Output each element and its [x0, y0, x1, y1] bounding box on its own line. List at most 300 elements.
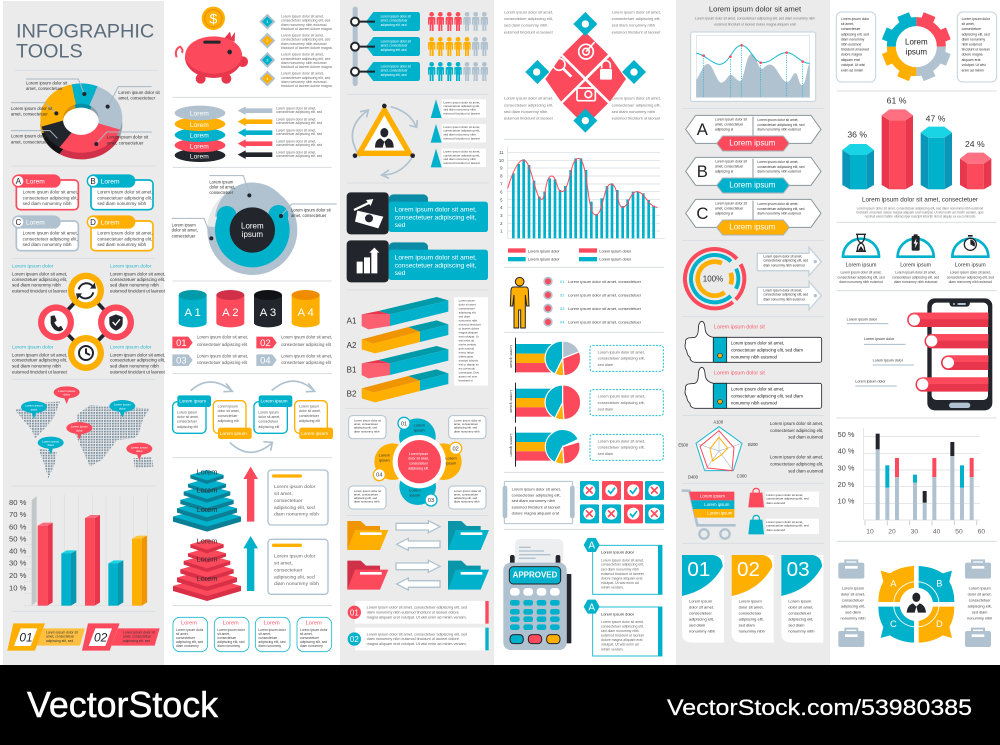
dashed text boxes: Lorem ipsum dolor sit amet,: [598, 395, 645, 399]
donut chart: amet, consectetuer: [11, 139, 48, 144]
triangle list: consectetuer adipiscing elit,: [443, 153, 480, 157]
numbered strip 02: diam nonummy nibh euismod tincidunt ut laoreet dolore: [367, 637, 459, 641]
four outlined text cards: adipiscing elit, sed: [300, 640, 327, 644]
stacked ellipses with arrows: consectetuer adipiscing elit, sed: [276, 110, 322, 114]
narrow text column: ut laoreet dolore: [459, 327, 480, 331]
corner text: euismod tincidunt ut laoreet: [612, 116, 661, 121]
dotted world map: Lorem ipsum: [114, 403, 131, 407]
lower middle quadrant: [346, 297, 664, 656]
network lower text: Lorem ipsum dolor sit amet,: [110, 352, 165, 357]
label box A: Lorem: [26, 179, 45, 186]
hexagonal prism bars: 36 %: [847, 129, 867, 139]
chart legend: [508, 248, 632, 262]
red pyramid: Lorem: [197, 574, 217, 583]
dotted world map: dolor: [119, 406, 126, 410]
semicircle icons: consectetuer adipiscing elit, sed: [892, 275, 939, 279]
stacked bars with pies: Lorem ipsum: [509, 390, 514, 414]
card 02: dolor sit amet,: [739, 605, 764, 610]
phone labels: Lorem ipsum dolor: [873, 359, 904, 363]
network lower text: Lorem ipsum dolor: [12, 345, 54, 351]
shopping bags with text: consectetuer adipiscing elit, sed: [766, 497, 809, 501]
hexagon row B: Lorem ipsum: [729, 181, 776, 190]
outlined arrows: diam nonummy nibh euismod: [763, 297, 805, 301]
shopping bags with text: [748, 488, 819, 534]
outlined arrows: diam nonummy nibh euismod: [763, 263, 805, 267]
process flow: adipiscing elit: [218, 419, 239, 423]
gear left text box: volutpat. Ut wisi: [841, 63, 865, 67]
text card upper: diam nonummy nibh: [274, 512, 319, 518]
flower diagram: Lorem: [379, 452, 391, 457]
stacked percent bar chart: 20 %: [838, 480, 855, 489]
process flow: Lorem ipsum: [299, 405, 319, 409]
hexagon row C: Lorem ipsum dolor sit amet,: [757, 202, 798, 206]
flower corner boxes: Lorem ipsum dolor sit: [454, 489, 481, 493]
dotted world map: Lorem ipsum: [71, 425, 88, 429]
stacked percent bar chart: 50 %: [838, 430, 855, 439]
orange person with list: 03: [560, 306, 565, 311]
stacked bars with pies: [509, 338, 581, 467]
callout A lower: Lorem ipsum dolor: [601, 611, 635, 616]
semicircle icons: Lorem ipsum dolor sit amet,: [895, 271, 936, 275]
numbered list: 4: [266, 76, 269, 81]
four outlined text cards: consectetuer: [176, 636, 196, 640]
numbered strip 01: [348, 601, 489, 624]
flower diagram: 02: [453, 446, 459, 452]
thumbs up card upper: Lorem ipsum dolor sit amet,: [731, 341, 784, 346]
donut chart: amet, consectetuer: [26, 86, 63, 91]
outlined arrows: consectetuer adipiscing elit, sed: [763, 293, 808, 297]
label box C: [12, 215, 78, 251]
narrow text column: consectetuer: [459, 307, 475, 311]
phone labels: Lorem ipsum dolor: [864, 337, 895, 341]
four outlined text cards: diam nonummy: [300, 644, 323, 648]
gear right text box: diam nonummy: [962, 37, 985, 41]
gear left text box: dolore magna: [841, 53, 862, 57]
process flow: consectetuer: [258, 420, 279, 424]
network lower text: euismod tincidunt ut laoreet: [12, 369, 68, 374]
label box A: sed diam nonummy nibh: [23, 201, 72, 206]
hexagon row B: consectetuer adipiscing elit, sed: [757, 165, 805, 169]
stacked ellipses with arrows: [175, 106, 322, 162]
chart legend: Lorem ipsum dolor: [599, 258, 632, 262]
stacked ellipses with arrows: Lorem ipsum dolor sit amet,: [276, 139, 316, 143]
gear left text box: tincidunt ut laoreet: [841, 48, 869, 52]
four outlined text cards: diam nonummy: [258, 644, 281, 648]
hexagon row C: adipiscing el: [715, 211, 734, 215]
concentric circle diagram: dolor sit amet,: [209, 185, 235, 190]
process flow: Lorem ipsum: [258, 411, 279, 415]
briefcase side text: nonummy nibh: [840, 616, 866, 620]
gear left text box: consectetuer: [841, 27, 861, 31]
process flow: adipiscing elit: [177, 425, 198, 429]
narrow text column: ullamcorper: [459, 355, 473, 359]
cylinders A1 to A4: A 2: [222, 307, 239, 319]
hexagon row B: diam nonummy nibh euismod: [757, 170, 801, 174]
four outlined text cards: adipiscing elit, sed: [217, 640, 245, 644]
flower diagram: Lorem: [414, 422, 426, 427]
stacked percent bar chart: 10: [866, 529, 874, 536]
flower diagram: ipsum: [446, 461, 457, 466]
shopping cart: Lorem ipsum: [704, 502, 730, 507]
card 01: Lorem ipsum: [689, 599, 713, 604]
hexagon row A: Lorem ipsum: [729, 139, 776, 148]
numbered tags 01 to 04: [172, 335, 332, 366]
label box D: [87, 215, 153, 251]
star wheel diagram: A: [890, 579, 897, 589]
numbered list: Lorem ipsum dolor sit amet,: [281, 34, 324, 38]
triangle list: Lorem ipsum dolor sit amet,: [443, 150, 480, 154]
label box D: consectetuer adipiscing elit,: [97, 236, 152, 241]
isometric bars: A2: [347, 341, 357, 350]
hexagon row C: [686, 199, 821, 235]
lower left quadrant: [7, 335, 333, 652]
narrow text column: nisl ut aliquip ex: [459, 363, 479, 367]
numbered tags 01 to 04: 01: [176, 338, 187, 348]
cylinders A1 to A4: A 4: [297, 307, 314, 319]
radar chart: E500: [678, 442, 689, 447]
flower corner boxes: diam nonummy nibh: [454, 500, 480, 504]
shopping cart: Lorem ipsum: [707, 511, 733, 516]
orange person with list: [510, 277, 642, 328]
triangle list: euismod tincidunt ut laoreet: [443, 112, 480, 116]
timeline tags: Lorem ipsum dolor sit: [381, 15, 411, 19]
badge 01: amet, consectetuer: [46, 635, 75, 639]
flower diagram: ipsum: [410, 492, 421, 497]
radar text: sed diam euismod: [788, 468, 824, 473]
red pyramid: Lorem: [197, 537, 217, 546]
prism caption: Lorem ipsum dolor sit amet, consectetuer adipiscing elit, sed diam nonummy nibh euismod: [857, 206, 984, 210]
donut chart: amet, consectetuer: [118, 96, 156, 101]
process flow: dolor sit amet,: [299, 409, 321, 413]
gear diagram: Lorem: [905, 37, 928, 46]
flower diagram: adipiscing elit.: [408, 466, 429, 470]
thumbs up card lower: Lorem ipsum dolor sit: [714, 370, 765, 376]
concentric circle diagram: consectetuer: [209, 190, 234, 195]
scroll text panel: consectetuer adipiscing elit,: [512, 492, 561, 497]
callout A lower: dolore magna aliquam erat: [601, 638, 642, 642]
stacked bars with pies: Lorem ipsum: [509, 433, 514, 457]
corner text: consectetuer adipiscing elit,: [504, 16, 553, 21]
growth banner: [347, 240, 488, 282]
star wheel diagram: B: [936, 579, 942, 589]
dashed text boxes: sed diam: [598, 452, 613, 456]
concentric circle diagram: amet, consectetuer: [291, 213, 327, 218]
cyan pyramid: Lorem: [197, 486, 217, 495]
outlined arrows: Lorem ipsum dolor sit amet,: [763, 254, 802, 258]
network side text: sed diam nonummy nibh: [110, 283, 159, 288]
hexagon row B: Lorem ipsum dolor sit: [715, 159, 747, 163]
thumbs up card lower: nonummy nibh euismod: [731, 400, 778, 405]
narrow text column: nonummy nibh: [459, 319, 478, 323]
semicircle icons: diam nonummy nibh euismod: [949, 280, 992, 284]
hexagonal prism bars: 47 %: [926, 113, 946, 123]
card 01: adipiscing elit,: [689, 617, 714, 622]
hexagon row B: [686, 157, 821, 193]
callout A upper: minim veniam,: [601, 586, 623, 590]
flower diagram: 01: [401, 421, 407, 427]
dotted world map: Lorem ipsum: [131, 445, 148, 449]
text card lower: Lorem ipsum dolor: [274, 553, 316, 559]
corner text: sed diam nonummy nibh: [612, 23, 655, 28]
prism caption: tincidunt ut laoreet dolore magna aliquam erat volutpat. Ut wisi enim ad minim veniam, quis: [856, 210, 984, 214]
triangle list: [431, 99, 486, 167]
hexagon row C: amet, consectetuer: [715, 206, 744, 210]
network side text: consectetuer adipiscing elit,: [110, 277, 165, 282]
stacked ellipses with arrows: consectetuer adipiscing elit, sed: [276, 143, 322, 147]
label box D: D: [90, 218, 96, 227]
semicircle icons: consectetuer adipiscing elit, sed: [837, 275, 885, 279]
hexagon row B: adipiscing el: [715, 169, 734, 173]
numbered strip 01: diam nonummy nibh euismod tincidunt ut laoreet dolore: [367, 610, 459, 614]
process flow: Lorem ipsum: [177, 411, 197, 415]
stacked percent bar chart: 50: [955, 529, 963, 536]
timeline tags: amet, consectetuer: [381, 69, 408, 73]
donut chart: Lorem ipsum dolor sit: [107, 135, 149, 140]
money banner: sed: [395, 222, 406, 229]
semicircle icons: [837, 234, 994, 284]
briefcase side text: Lorem ipsum: [969, 587, 991, 591]
narrow text column: euismod tincidunt: [459, 323, 481, 327]
radar text: Lorem ipsum dolor sit amet,: [770, 421, 823, 426]
thumbs up card upper: [685, 321, 822, 362]
hexagon row C: consectetuer adipiscing elit, sed: [757, 207, 805, 211]
numbered list: 1: [266, 19, 269, 24]
line and bar chart: 1: [500, 229, 503, 234]
donut chart: [11, 79, 161, 159]
label box B: [87, 174, 153, 210]
label box B: B: [90, 177, 96, 186]
gear right text box: aliquam erat: [962, 58, 981, 62]
line and bar chart: 11: [499, 150, 504, 155]
hexagon row A: A: [697, 120, 709, 139]
numbered list: Lorem ipsum dolor sit amet,: [281, 53, 324, 57]
outlined arrows: [757, 247, 821, 310]
3D bar chart: 70 %: [9, 510, 27, 519]
flower corner boxes: adipiscing elit, sed: [354, 496, 378, 500]
briefcase side text: [840, 587, 992, 620]
network side text: euismod tincidunt ut laoreet: [110, 289, 166, 294]
thumbs up card lower: [685, 367, 822, 408]
dotted world map: dolor: [47, 443, 54, 447]
card 03: dolor sit amet,: [788, 605, 813, 610]
numbered list: diam nonummy nibh euismod: [281, 80, 327, 84]
stacked ellipses with arrows: Lorem: [190, 143, 209, 150]
triangle list: sed diam nonummy nibh: [443, 132, 476, 136]
gear left text box: diam nonummy: [841, 37, 865, 41]
hexagon row A: amet, consectetuer: [715, 122, 744, 126]
callout A upper: [584, 538, 662, 594]
timeline tags: [351, 7, 420, 86]
gear right text box: consectetuer: [962, 27, 982, 31]
label box A: [12, 174, 78, 210]
network side text: consectetuer adipiscing elit,: [12, 277, 67, 282]
circle network with four icons: [38, 273, 134, 371]
narrow text column: dolor sit amet,: [459, 303, 477, 307]
network side text: sed diam nonummy nibh: [12, 283, 61, 288]
callout A lower: volutpat. Ut wisi enim ad: [601, 643, 639, 647]
timeline tags: adipiscing elit, sed: [381, 73, 407, 77]
card 03: [781, 555, 823, 643]
flower diagram: ipsum: [379, 457, 390, 462]
phone labels: [847, 318, 914, 386]
numbered tags 01 to 04: consectetuer adipiscing elit: [197, 360, 248, 365]
money banner: [347, 192, 488, 234]
callout A lower: consectetuer adipiscing elit,: [601, 624, 644, 628]
hexagon row A: [686, 115, 821, 151]
four outlined text cards: diam nonummy: [217, 644, 240, 648]
title: INFOGRAPHIC: [16, 21, 154, 42]
network side text: euismod tincidunt ut laoreet: [12, 289, 68, 294]
hexagonal prism bars: 61 %: [887, 95, 907, 105]
dashed text boxes: [590, 345, 663, 460]
callout A upper: Lorem ipsum dolor: [601, 550, 635, 555]
card 02: 02: [737, 558, 760, 581]
dotted world map: [15, 386, 153, 478]
numbered list: tincidunt ut laoreet dolore magna: [281, 84, 332, 88]
flower corner boxes: amet, consectetuer: [354, 422, 378, 426]
thumbs up card lower: Lorem ipsum dolor sit amet,: [731, 387, 784, 392]
flower diagram: [373, 417, 462, 506]
corner text: consectetuer adipiscing elit,: [612, 16, 661, 21]
semicircle icons: diam nonummy nibh euismod: [894, 280, 938, 284]
label box A: Lorem ipsum dolor sit amet,: [23, 190, 78, 195]
stacked ellipses with arrows: Lorem: [190, 122, 209, 129]
donut chart: Lorem ipsum dolor sit: [11, 106, 53, 111]
flower corner boxes: amet, consectetuer: [454, 422, 478, 426]
flower corner boxes: diam nonummy nibh: [454, 429, 480, 433]
text card lower: sit amet,: [274, 560, 293, 566]
timeline tags: adipiscing elit, sed: [381, 23, 407, 27]
narrow text column: minim veniam,: [459, 343, 477, 347]
text card upper: [268, 470, 328, 525]
corner text: [504, 9, 661, 121]
triangle list: sed diam nonummy nibh: [443, 157, 476, 161]
narrow text column: hendrerit in: [459, 379, 473, 383]
label box D: Lorem: [101, 220, 120, 227]
narrow text column: consequat. Duis: [459, 371, 480, 375]
dashed text boxes: sed diam: [598, 363, 613, 367]
line and bar chart: 4: [500, 205, 503, 210]
hexagon row B: Lorem ipsum dolor sit amet,: [757, 160, 798, 164]
corner text: euismod tincidunt ut laoreet: [612, 29, 661, 34]
numbered list: consectetuer adipiscing elit, sed: [281, 57, 330, 61]
four outlined text cards: adipiscing elit, sed: [258, 640, 286, 644]
chart legend: Lorem ipsum dolor: [599, 249, 632, 253]
outlined arrows: Lorem ipsum dolor sit amet,: [763, 288, 802, 292]
hexagon row C: Lorem ipsum dolor sit: [715, 201, 747, 205]
badge 02: [82, 623, 160, 651]
callout A upper: Lorem ipsum dolor sit amet,: [601, 558, 644, 562]
card 01: [682, 555, 724, 643]
line and bar chart: 3: [500, 213, 503, 218]
numbered tags 01 to 04: Lorem ipsum dolor sit amet,: [281, 335, 332, 340]
dotted world map: dolor: [63, 393, 70, 397]
corner text: Lorem ipsum dolor sit amet,: [612, 9, 661, 14]
red pyramid: [173, 537, 241, 601]
triangle list: consectetuer adipiscing elit,: [443, 104, 480, 108]
text card lower: adipiscing elit, sed: [274, 574, 315, 580]
dashed text boxes: consectetuer adipiscing elit,: [598, 357, 645, 361]
corner text: consectetuer adipiscing elit,: [504, 102, 553, 107]
red pyramid: Lorem: [197, 554, 217, 563]
process flow: Lorem ipsum: [179, 399, 206, 404]
callout A lower: A: [588, 602, 595, 613]
triangle list: euismod tincidunt ut laoreet: [443, 161, 480, 165]
corner text: consectetuer adipiscing elit,: [612, 102, 661, 107]
title: TOOLS: [16, 41, 83, 62]
four outlined text cards: sit amet,: [300, 632, 313, 636]
process flow: adipiscing elit: [299, 419, 320, 423]
smartphone with bars: [907, 298, 992, 410]
stacked ellipses with arrows: consectetuer adipiscing elit, sed: [276, 154, 322, 158]
flower corner boxes: Lorem ipsum dolor sit: [354, 489, 381, 493]
badge 01: adipiscing elit, sed: [46, 639, 73, 643]
star wheel diagram: C: [890, 619, 897, 629]
flower diagram: Lorem ipsum: [409, 452, 429, 456]
callout A lower: sed diam nonummy nibh: [601, 629, 639, 633]
radar chart: A100: [713, 419, 724, 424]
radar text: sed diam euismod: [788, 435, 824, 440]
gear right text box: dolore magna: [962, 53, 983, 57]
briefcase side text: consectetuer: [969, 599, 991, 603]
scroll text panel: dolore magna aliquam erat: [512, 510, 560, 515]
cyan pyramid: [173, 467, 241, 532]
process flow: dolor sit amet,: [258, 415, 280, 419]
triangle list: sed diam nonummy nibh: [443, 108, 476, 112]
flower corner boxes: diam nonummy nibh: [354, 429, 380, 433]
gear left text box: adipiscing elit, sed: [841, 32, 869, 36]
hexagonal prism bars: [842, 95, 991, 189]
payment terminal: APPROVED: [513, 571, 558, 580]
network lower text: sed diam nonummy nibh: [12, 363, 61, 368]
badge 01: 01: [19, 631, 33, 645]
3D bar chart: 60 %: [9, 522, 27, 531]
corner text: euismod tincidunt ut laoreet: [504, 116, 554, 121]
scroll text panel: [503, 481, 575, 524]
donut chart: Lorem ipsum dolor sit: [26, 80, 68, 85]
numbered tags 01 to 04: consectetuer adipiscing elit: [281, 342, 332, 347]
dotted world map: dolor: [136, 449, 143, 453]
orange person with list: 01: [560, 279, 565, 284]
badge 02: Lorem ipsum dolor sit: [123, 630, 155, 634]
badge 02: adipiscing elit, sed: [123, 639, 150, 643]
triangle list: Lorem ipsum dolor sit amet,: [443, 100, 480, 104]
gear left text box: enim ad minim: [841, 68, 863, 72]
chart legend: Lorem ipsum dolor: [528, 258, 560, 262]
money banner: consectetuer adipiscing elit,: [395, 215, 477, 222]
briefcase side text: sed diam: [845, 610, 861, 614]
narrow text column: [454, 297, 488, 386]
3D bar chart: 50 %: [9, 535, 27, 544]
process flow: dolor sit amet,: [218, 409, 240, 413]
narrow text column: autem vel eum: [459, 375, 478, 379]
dotted world map: dolor: [76, 428, 83, 432]
numbered strip 01: Lorem ipsum dolor sit amet, consectetuer adipiscing elit, sed: [367, 606, 467, 610]
timeline tags: amet, consectetuer: [381, 44, 408, 48]
badge 01: [7, 623, 85, 651]
numbered list: tincidunt ut laoreet dolore magna: [281, 46, 332, 50]
line and bar chart: 8: [500, 174, 503, 179]
process flow: consectetuer: [218, 414, 238, 418]
line and bar chart: 5: [500, 197, 503, 202]
triangle list: euismod tincidunt ut laoreet: [443, 136, 480, 140]
stacked ellipses with arrows: Lorem ipsum dolor sit amet,: [276, 128, 316, 132]
upper middle quadrant: [347, 7, 665, 332]
orange person with list: Lorem ipsum dolor sit amet, consectetuer: [568, 279, 642, 284]
timeline tags: Lorem ipsum dolor sit: [381, 40, 411, 44]
narrow text column: magna aliquam: [459, 331, 479, 335]
footer bar: VectorStock.com/53980385: [667, 695, 972, 720]
